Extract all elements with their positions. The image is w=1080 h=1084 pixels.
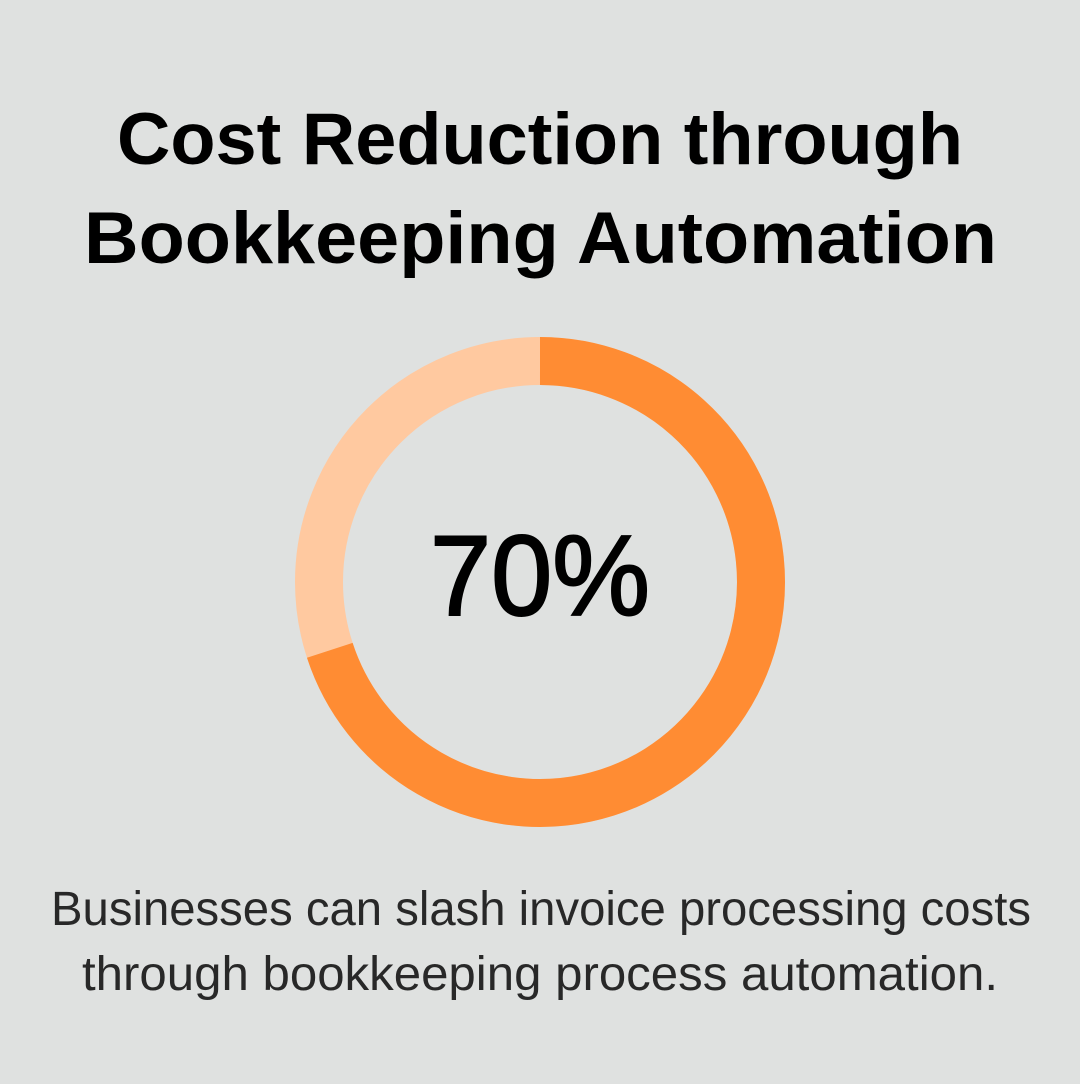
donut chart: 70% — [319, 361, 761, 803]
description: through bookkeeping process automation. — [82, 948, 998, 1001]
title — [84, 99, 997, 279]
description — [51, 883, 1031, 1001]
value: 70%: 70% — [430, 513, 650, 640]
description: Businesses can slash invoice processing costs — [51, 883, 1031, 936]
title: Cost Reduction through — [117, 99, 963, 180]
title: Bookkeeping Automation — [84, 198, 997, 279]
